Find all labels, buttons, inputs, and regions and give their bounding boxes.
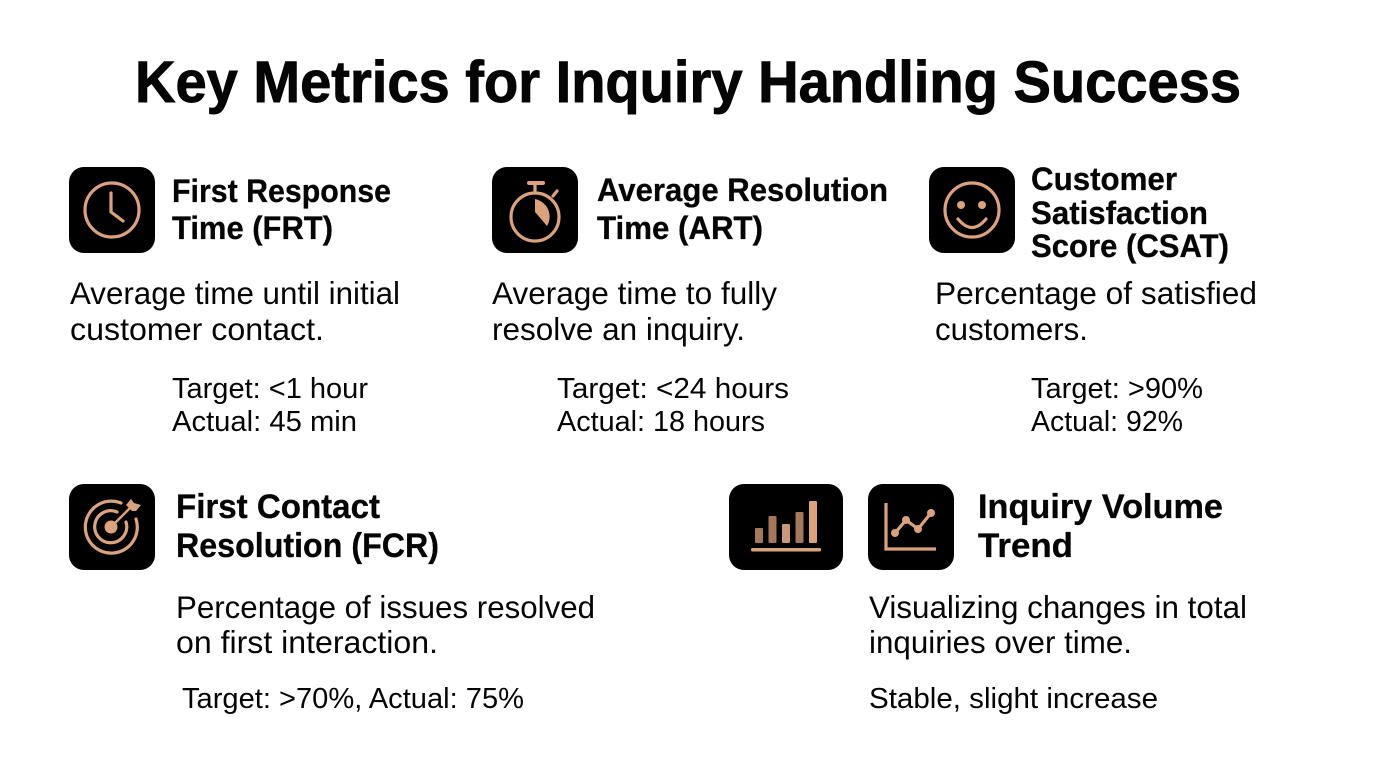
description: average resolution time: Average time to fully bbox=[492, 275, 777, 311]
description: average resolution time bbox=[492, 275, 777, 347]
trend status: Stable, slight increase bbox=[869, 683, 1158, 715]
icon: smiley face bbox=[929, 167, 1015, 253]
target and actual: first response time: Actual: 45 min bbox=[172, 406, 357, 438]
heading: customer satisfaction score: Satisfaction bbox=[1031, 195, 1208, 231]
description: first contact resolution bbox=[176, 589, 595, 660]
heading: first contact resolution bbox=[176, 488, 439, 565]
heading: customer satisfaction score: Score (CSAT) bbox=[1031, 228, 1229, 264]
description: customer satisfaction score bbox=[935, 275, 1257, 347]
heading: average resolution time bbox=[597, 172, 888, 246]
heading: customer satisfaction score: Customer bbox=[1031, 161, 1177, 197]
target and actual: average resolution time bbox=[557, 373, 789, 438]
description: inquiry volume trend: Visualizing changes in total bbox=[869, 589, 1247, 625]
panel: inquiry volume trend bbox=[729, 484, 1247, 715]
heading: first response time: First Response bbox=[172, 173, 391, 209]
target and actual: customer satisfaction score: Target: >90% bbox=[1031, 373, 1203, 405]
heading: inquiry volume trend bbox=[978, 488, 1223, 565]
title: Key Metrics for Inquiry Handling Success bbox=[135, 50, 1241, 115]
heading: inquiry volume trend: Inquiry Volume bbox=[978, 488, 1223, 526]
heading: customer satisfaction score bbox=[1031, 161, 1229, 264]
panel: first contact resolution bbox=[69, 484, 595, 715]
description: average resolution time: resolve an inquiry. bbox=[492, 311, 745, 347]
target and actual: average resolution time: Target: <24 hours bbox=[557, 373, 789, 405]
description: first contact resolution: Percentage of issues resolved bbox=[176, 589, 595, 625]
heading: first contact resolution: Resolution (FCR) bbox=[176, 527, 439, 565]
heading: inquiry volume trend: Trend bbox=[978, 527, 1073, 565]
icon: stopwatch bbox=[492, 167, 578, 253]
panel: customer satisfaction score bbox=[929, 161, 1257, 438]
heading: first response time bbox=[172, 173, 391, 246]
icon: target with arrow bbox=[69, 484, 155, 570]
heading: average resolution time: Average Resolution bbox=[597, 172, 888, 208]
description: inquiry volume trend bbox=[869, 589, 1247, 660]
target and actual: average resolution time: Actual: 18 hours bbox=[557, 406, 765, 438]
icon: clock bbox=[69, 167, 155, 253]
heading: average resolution time: Time (ART) bbox=[597, 210, 763, 246]
description: first response time: Average time until initial bbox=[70, 275, 400, 311]
description: first contact resolution: on first interaction. bbox=[176, 624, 438, 660]
description: inquiry volume trend: inquiries over time. bbox=[869, 624, 1132, 660]
icon: line chart bbox=[868, 484, 954, 570]
target and actual: customer satisfaction score bbox=[1031, 373, 1203, 438]
panel: first response time bbox=[69, 167, 400, 438]
target and actual: first contact resolution: Target: >70%, Actual: 75% bbox=[182, 683, 524, 715]
icon: bar chart bbox=[729, 484, 843, 570]
description: first response time bbox=[70, 275, 400, 347]
target and actual: first response time: Target: <1 hour bbox=[172, 373, 368, 405]
heading: first contact resolution: First Contact bbox=[176, 488, 380, 526]
target and actual: customer satisfaction score: Actual: 92% bbox=[1031, 406, 1183, 438]
description: customer satisfaction score: customers. bbox=[935, 311, 1088, 347]
heading: first response time: Time (FRT) bbox=[172, 210, 333, 246]
description: customer satisfaction score: Percentage of satisfied bbox=[935, 275, 1257, 311]
description: first response time: customer contact. bbox=[70, 311, 324, 347]
panel: average resolution time bbox=[492, 167, 888, 438]
target and actual: first response time bbox=[172, 373, 368, 438]
